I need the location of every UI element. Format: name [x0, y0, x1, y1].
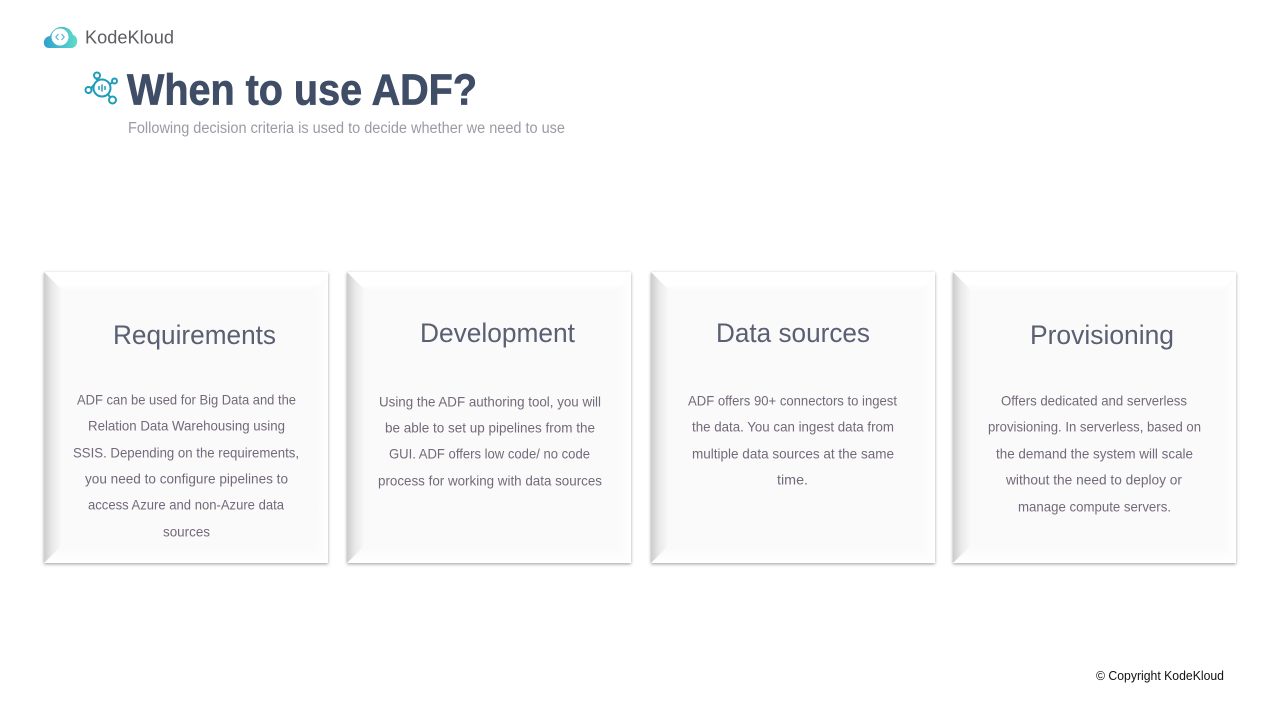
- card bevel: [651, 272, 935, 563]
- body text: the data. You can ingest data from: [692, 418, 894, 434]
- icon: cloud: [44, 27, 77, 48]
- body text: access Azure and non-Azure data: [88, 496, 284, 512]
- body text: without the need to deploy or: [1005, 472, 1182, 488]
- logo: KodeKloud: [44, 26, 174, 48]
- body text: Using the ADF authoring tool, you will: [379, 394, 601, 410]
- card bevel: [953, 272, 1236, 563]
- body text: manage compute servers.: [1018, 498, 1171, 514]
- body text: [378, 394, 602, 488]
- body text: [988, 392, 1201, 514]
- body text: sources: [163, 524, 210, 540]
- panel: provisioning: [953, 272, 1236, 563]
- panel: development: [347, 272, 631, 563]
- body text: [73, 392, 299, 540]
- panel: data sources: [651, 272, 935, 563]
- body text: process for working with data sources: [378, 472, 602, 488]
- panel: requirements: [44, 272, 328, 563]
- title: When to use ADF?: [127, 66, 477, 114]
- heading: Provisioning: [1030, 320, 1174, 350]
- icon: network with magnifier: [86, 72, 117, 104]
- body text: provisioning. In serverless, based on: [988, 418, 1201, 434]
- body text: ADF can be used for Big Data and the: [77, 392, 296, 408]
- subtitle: Following decision criteria is used to decide whether we need to use: [128, 120, 565, 137]
- copyright: © Copyright KodeKloud: [1096, 669, 1224, 683]
- body text: be able to set up pipelines from the: [385, 420, 595, 436]
- body text: time.: [777, 472, 808, 488]
- body text: you need to configure pipelines to: [85, 470, 288, 486]
- body text: [688, 392, 897, 488]
- body text: Relation Data Warehousing using: [88, 418, 285, 434]
- card bevel: [347, 272, 631, 563]
- body text: multiple data sources at the same: [692, 446, 894, 462]
- heading: Requirements: [113, 320, 276, 350]
- body text: SSIS. Depending on the requirements,: [73, 444, 299, 460]
- body text: the demand the system will scale: [996, 446, 1193, 462]
- body text: ADF offers 90+ connectors to ingest: [688, 392, 897, 408]
- heading: Development: [420, 318, 575, 348]
- body text: GUI. ADF offers low code/ no code: [389, 446, 590, 462]
- body text: Offers dedicated and serverless: [1001, 392, 1187, 408]
- heading: Data sources: [716, 318, 870, 348]
- logo wordmark: KodeKloud: [85, 26, 174, 48]
- card bevel: [44, 272, 328, 563]
